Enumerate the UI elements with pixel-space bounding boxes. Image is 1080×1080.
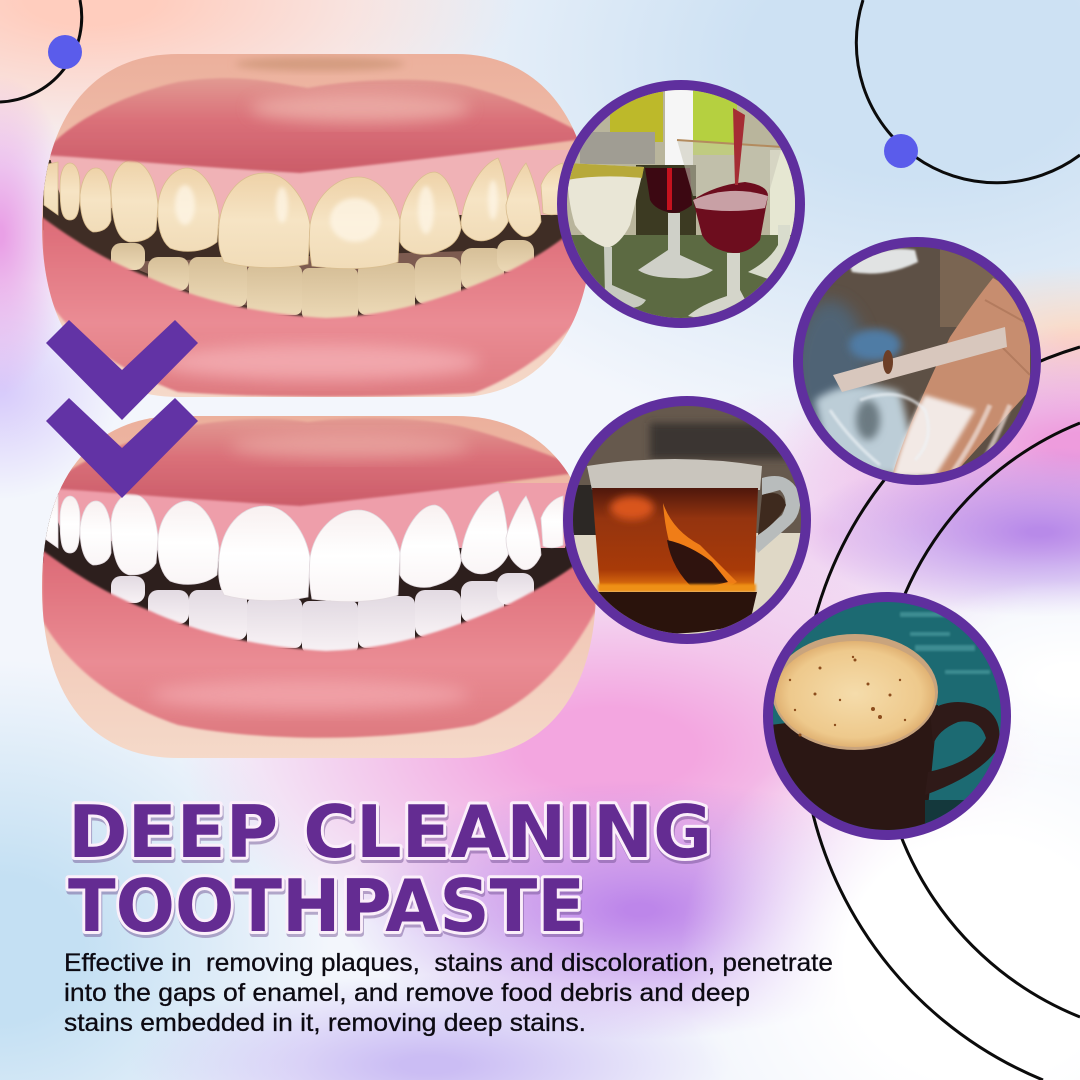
description text: stains embedded in it, removing deep stains.: [64, 1009, 586, 1037]
blue dot top left: [48, 35, 82, 69]
photo: white teeth (after): [42, 416, 596, 758]
photo circle: cup of coffee: [763, 592, 1011, 840]
description text: [64, 949, 833, 1037]
blue dot top right: [884, 134, 918, 168]
title: [68, 790, 713, 951]
title: DEEP CLEANING: [68, 790, 712, 874]
chevron arrow 2: [46, 398, 198, 498]
photo circle: wine glasses: [557, 80, 805, 328]
photo circle: cup of tea: [563, 396, 811, 644]
description text: into the gaps of enamel, and remove food debris and deep: [64, 979, 750, 1007]
description text: Effective in removing plaques, stains and discoloration, penetrate: [64, 949, 833, 977]
title: TOOTHPASTE: [68, 864, 585, 948]
chevron arrow 1: [46, 320, 198, 420]
photo: stained teeth (before): [42, 54, 592, 397]
photo circle: cigarette smoke: [792, 237, 1041, 485]
title: DEEP CLEANING: [69, 793, 713, 877]
title: TOOTHPASTE: [69, 867, 586, 951]
